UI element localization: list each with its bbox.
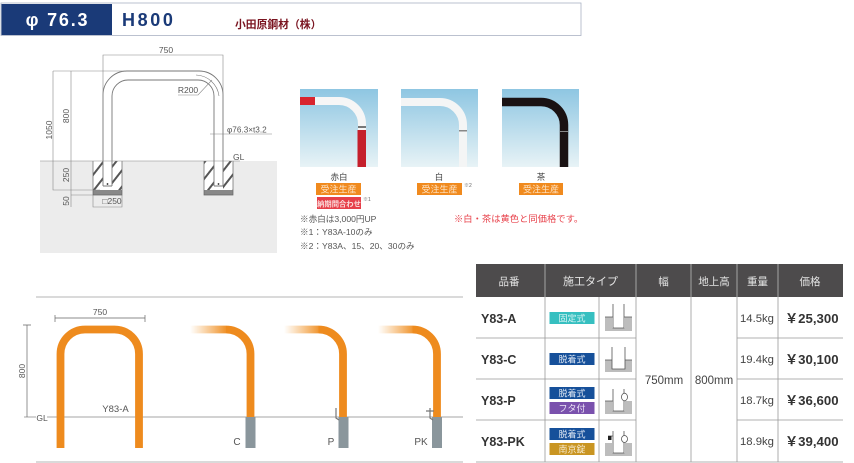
dimension lines xyxy=(40,55,272,207)
table header xyxy=(476,264,843,297)
header bar xyxy=(1,3,581,36)
row Y83-A: Y83-A xyxy=(481,312,516,326)
dimension 750: 750 xyxy=(93,307,107,317)
row Y83-PK: 脱着式 xyxy=(558,428,586,440)
bollard C: C xyxy=(233,437,241,448)
row Y83-PK: ￥39,400 xyxy=(785,434,839,449)
color option: brown xyxy=(502,89,579,195)
row Y83-C xyxy=(481,352,839,367)
color notes: ※赤白は3,000円UP xyxy=(300,213,377,224)
height heading: H800 xyxy=(122,10,175,30)
row Y83-C: Y83-C xyxy=(481,353,516,367)
row Y83-P: 18.7kg xyxy=(740,395,774,407)
table header: 重量 xyxy=(747,275,768,288)
row Y83-A xyxy=(481,311,839,326)
dimension labels: R200 xyxy=(178,85,198,95)
manufacturer name: 小田原鋼材（株） xyxy=(235,17,321,31)
row Y83-A: ￥25,300 xyxy=(785,311,839,326)
red color note: ※白・茶は黄色と同価格です。 xyxy=(454,213,583,224)
color notes: ※2：Y83A、15、20、30のみ xyxy=(300,241,415,251)
table header: 施工タイプ xyxy=(563,275,618,288)
badge: made to order: 受注生産 xyxy=(320,184,357,194)
row Y83-A: 固定式 xyxy=(558,312,586,324)
icon: lid type xyxy=(605,389,632,414)
bollard Y83-A xyxy=(60,330,139,448)
icon: removable type xyxy=(605,347,632,372)
row Y83-P: ￥36,600 xyxy=(785,393,839,408)
merged width and height cells: 800mm xyxy=(695,375,733,387)
pipe outline xyxy=(103,71,223,186)
color notes xyxy=(300,213,415,251)
row Y83-P xyxy=(481,387,839,414)
badge: made to order: 受注生産 xyxy=(523,184,559,194)
merged width and height cells xyxy=(645,375,733,387)
dimension labels xyxy=(44,45,267,206)
color option: white: 白 xyxy=(435,172,443,182)
product illustration panel xyxy=(17,297,463,462)
right foundation xyxy=(204,161,233,195)
row Y83-PK: 18.9kg xyxy=(740,436,774,448)
row Y83-PK: Y83-PK xyxy=(481,435,525,449)
bollard Y83-A: Y83-A xyxy=(102,404,129,415)
bollard C xyxy=(190,330,256,448)
dimension labels: GL xyxy=(233,152,245,162)
color notes: ※1：Y83A-10のみ xyxy=(300,227,373,237)
color option: brown: 茶 xyxy=(537,172,546,182)
dimension labels: 50 xyxy=(61,196,71,206)
row Y83-P: 脱着式 xyxy=(558,388,586,398)
row Y83-A: 14.5kg xyxy=(740,313,774,325)
left foundation xyxy=(93,161,122,195)
table grid xyxy=(476,297,843,462)
row Y83-C: 19.4kg xyxy=(740,354,774,366)
spec table xyxy=(476,264,843,462)
merged width and height cells: 750mm xyxy=(645,375,683,387)
GL label: GL xyxy=(36,413,48,423)
dimension drawing xyxy=(40,45,277,253)
bollard PK: PK xyxy=(414,437,428,448)
table header: 地上高 xyxy=(698,275,730,288)
row Y83-C: 脱着式 xyxy=(558,354,586,364)
dimension labels: 1050 xyxy=(44,120,54,139)
dimension labels: □250 xyxy=(102,196,122,206)
row Y83-P: フタ付 xyxy=(558,404,586,414)
row Y83-C: ￥30,100 xyxy=(785,352,839,367)
bollard P: P xyxy=(328,437,335,448)
badge: inquire delivery: 納期問合わせ xyxy=(317,200,361,208)
dimension labels: 800 xyxy=(61,109,71,123)
row Y83-P: Y83-P xyxy=(481,394,516,408)
dimension labels: 250 xyxy=(61,168,71,182)
color option: red and white: ※1 xyxy=(363,197,371,203)
ground area xyxy=(40,161,277,253)
dimension 800 xyxy=(17,325,31,417)
table header: 幅 xyxy=(658,275,669,288)
row Y83-PK: 南京錠 xyxy=(558,444,586,454)
row Y83-PK xyxy=(481,428,839,455)
diameter heading xyxy=(2,4,112,35)
icon: padlock type xyxy=(605,431,632,456)
dimension 800: 800 xyxy=(17,364,27,378)
diameter heading: φ 76.3 xyxy=(26,10,89,30)
table header: 価格 xyxy=(800,275,821,288)
dimension labels: φ76.3×t3.2 xyxy=(227,126,267,134)
bollard P xyxy=(284,330,348,448)
color option: white: ※2 xyxy=(464,183,472,189)
icon: fixed type xyxy=(605,304,632,331)
color option: red and white xyxy=(300,89,378,209)
dimension 750 xyxy=(55,307,145,322)
dimension labels: 750 xyxy=(159,45,173,55)
color option: white xyxy=(401,89,478,195)
bollard PK xyxy=(378,330,442,448)
badge: made to order: 受注生産 xyxy=(421,184,458,194)
table header: 品番 xyxy=(498,276,520,288)
color option: red and white: 赤白 xyxy=(330,172,348,182)
